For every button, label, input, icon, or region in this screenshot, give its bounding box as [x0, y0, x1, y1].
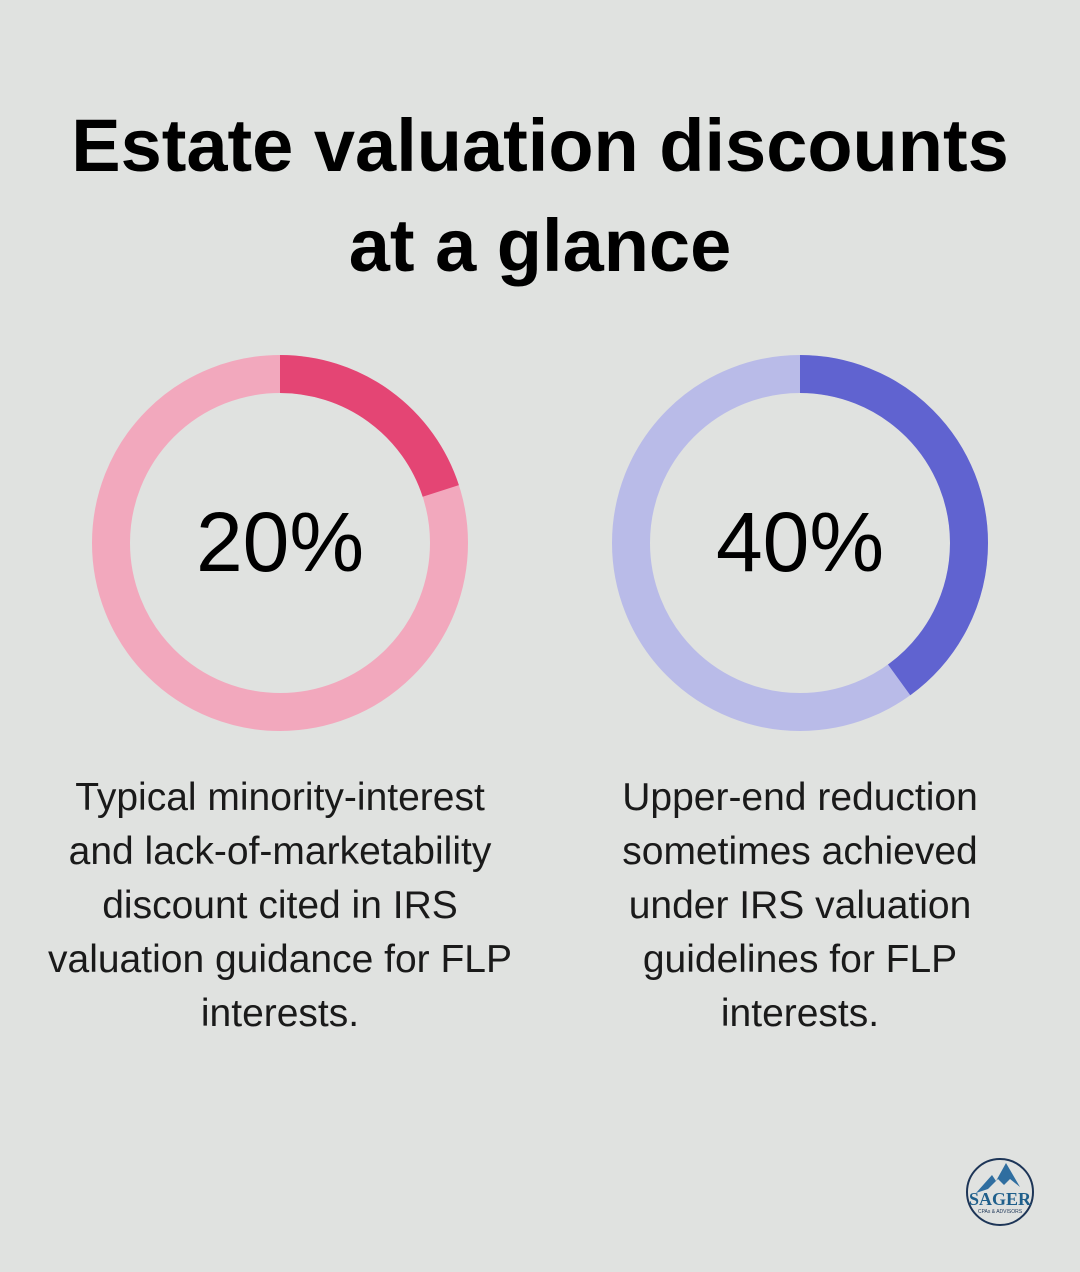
text: 40% description: Upper-end reduction: [622, 776, 978, 819]
text: 20% description: valuation guidance for FLP: [48, 938, 512, 981]
logo: Sager: SAGER: [969, 1189, 1032, 1209]
text: 40% description: sometimes achieved: [622, 830, 978, 873]
title: Estate valuation discounts: [71, 104, 1009, 187]
chart: 40% donut: [612, 355, 988, 731]
text: 20% description: [48, 776, 512, 1035]
chart: 20% donut: [92, 355, 468, 731]
logo: Sager: CPAs & ADVISORS: [978, 1209, 1023, 1215]
chart: 20% donut: 20%: [196, 495, 364, 589]
text: 40% description: under IRS valuation: [629, 884, 971, 927]
logo: Sager: [966, 1158, 1034, 1226]
chart: 40% donut: 40%: [716, 495, 884, 589]
title: [71, 104, 1009, 287]
text: 20% description: interests.: [201, 992, 359, 1035]
text: 40% description: interests.: [721, 992, 879, 1035]
text: 20% description: Typical minority-interest: [75, 776, 485, 819]
text: 20% description: discount cited in IRS: [102, 884, 458, 927]
text: 40% description: [622, 776, 978, 1035]
text: 20% description: and lack-of-marketability: [69, 830, 491, 873]
title: at a glance: [349, 204, 731, 287]
text: 40% description: guidelines for FLP: [643, 938, 957, 981]
